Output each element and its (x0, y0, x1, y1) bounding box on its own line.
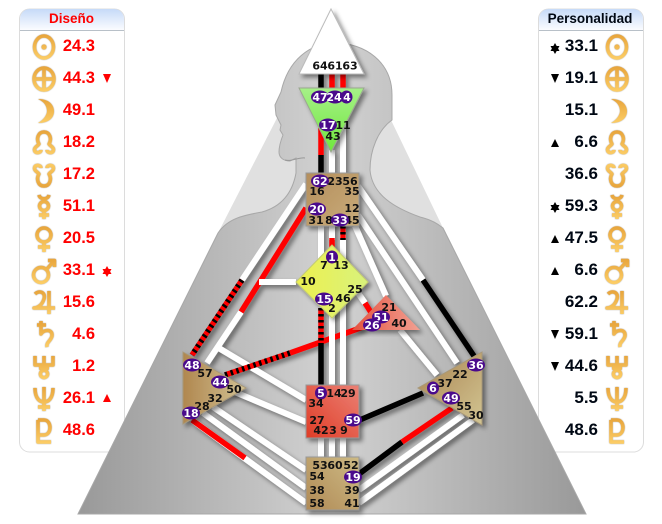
personality activation values: 48.6 (565, 420, 598, 439)
center: throat square: 31 (308, 214, 324, 227)
design activation values: 15.6 (63, 293, 95, 311)
center: root square: 58 (309, 497, 325, 510)
personality activation values: 44.6 (565, 356, 598, 375)
center: G diamond: 1 (328, 251, 336, 264)
center: ajna triangle: 17 (320, 119, 336, 132)
personality activation values: 36.6 (565, 164, 598, 183)
personality activation values: 62.2 (565, 292, 598, 311)
center: left spleen triangle (182, 352, 246, 424)
center: right solar plexus triangle: 6 (429, 382, 437, 395)
center: root square: 39 (344, 484, 360, 497)
center: ajna triangle: 47 (312, 91, 328, 104)
channel: sacral to right triangle, black and red (355, 408, 452, 477)
design activation values: 26.1 (63, 389, 95, 407)
center: root square: 19 (345, 471, 361, 484)
center: root square: 38 (309, 484, 325, 497)
center: G diamond: 7 (320, 259, 328, 272)
design activation values: 49.1 (63, 101, 95, 119)
center: ajna triangle: 11 (335, 119, 351, 132)
personality activation values (565, 36, 598, 439)
center: left spleen triangle: 48 (184, 359, 200, 372)
center: throat square: 35 (344, 185, 360, 198)
channel: spleen to ego striped (225, 353, 290, 375)
design markers (102, 74, 112, 402)
center: ajna triangle (299, 88, 364, 152)
center: ego triangle: 51 (373, 311, 389, 324)
center: G diamond (296, 245, 368, 318)
center: head triangle (299, 9, 364, 74)
center: G diamond: 25 (347, 283, 363, 296)
design activation values: 33.1 (63, 261, 95, 279)
center: left spleen triangle: 50 (226, 383, 242, 396)
center: root square: 52 (343, 459, 359, 472)
center: throat square: 33 (332, 214, 348, 227)
personality activation values: 5.5 (574, 388, 598, 407)
center: sacral-red square: 29 (340, 387, 356, 400)
center: ego triangle (352, 295, 420, 332)
channels: lines under the verticals (192, 215, 473, 503)
center: G diamond: 15 (316, 293, 332, 306)
channels (192, 74, 474, 503)
center: throat square: 12 (344, 202, 360, 215)
center: throat square: 62 (312, 175, 328, 188)
center: sacral-red square: 3 (329, 424, 337, 437)
panel header: Diseño (20, 9, 124, 30)
center: root square: 54 (309, 470, 325, 483)
design activation values: 18.2 (63, 133, 95, 151)
design activation values: 1.2 (72, 357, 95, 375)
center: sacral-red square: 14 (326, 387, 342, 400)
center: right solar plexus triangle: 49 (443, 392, 459, 405)
channel: left outer, white and striped (192, 184, 306, 355)
center: throat square: 16 (309, 185, 325, 198)
center: right solar plexus triangle (418, 352, 485, 425)
personality activation values: 6.6 (574, 132, 598, 151)
personality activation values: 19.1 (565, 68, 598, 87)
design activation values: 44.3 (63, 69, 95, 87)
center: right solar plexus triangle: 22 (452, 368, 468, 381)
panel header: Diseño: Diseño (49, 11, 94, 26)
center: ajna triangle: 4 (343, 91, 351, 104)
center: throat square: 23 (327, 175, 343, 188)
center: root square (306, 457, 362, 510)
center: left spleen triangle: 44 (212, 376, 228, 389)
center: G diamond: 13 (333, 259, 349, 272)
center: sacral-red square (306, 385, 362, 438)
personality activation values: 59.3 (565, 196, 598, 215)
center: ego triangle: 26 (364, 319, 380, 332)
channel: right outer, white and black (358, 186, 474, 356)
design activation values: 48.6 (63, 421, 95, 439)
design activation values: 4.6 (72, 325, 95, 343)
panel header: Personalidad (539, 9, 643, 30)
center: ajna triangle: 43 (325, 130, 341, 143)
center: ajna triangle: 24 (326, 91, 342, 104)
center: throat square (306, 173, 360, 227)
center: sacral-red square: 59 (345, 414, 361, 427)
center: G diamond: 2 (328, 302, 336, 315)
center: root square: 60 (327, 459, 343, 472)
center: throat square: 45 (344, 214, 360, 227)
center: right solar plexus triangle: 30 (468, 409, 484, 422)
center: G diamond: 10 (300, 275, 316, 288)
center: left spleen triangle: 28 (194, 400, 210, 413)
personality activation values: 6.6 (574, 260, 598, 279)
center: ego triangle: 21 (381, 301, 397, 314)
center: throat square: 20 (309, 203, 325, 216)
design activation values: 20.5 (63, 229, 95, 247)
center: G diamond: 46 (335, 292, 351, 305)
body silhouette background (78, 43, 586, 514)
personality activation values: 59.1 (565, 324, 598, 343)
center: sacral-red square: 34 (308, 397, 324, 410)
center: throat square: 8 (325, 214, 333, 227)
personality activation values: 15.1 (565, 100, 598, 119)
center: sacral-red square: 42 (313, 424, 329, 437)
center: right solar plexus triangle: 36 (468, 359, 484, 372)
design planet icons (34, 36, 55, 442)
center: ego triangle: 40 (391, 317, 407, 330)
design activation values: 24.3 (63, 37, 95, 55)
vertical channels (321, 74, 343, 460)
center: right solar plexus triangle: 55 (456, 400, 472, 413)
design activation values: 51.1 (63, 197, 95, 215)
personality markers (550, 43, 560, 371)
personality planet icons (606, 36, 628, 442)
center: left spleen triangle: 18 (183, 407, 199, 420)
center: sacral-red square: 9 (340, 424, 348, 437)
panel header: Personalidad: Personalidad (548, 11, 632, 26)
design activation values: 17.2 (63, 165, 95, 183)
center: sacral-red square: 27 (309, 414, 325, 427)
panel: Diseño (20, 9, 124, 452)
channel: G to ego (358, 293, 372, 314)
center: left spleen triangle: 57 (197, 367, 213, 380)
design activation values (63, 37, 95, 439)
center: head triangle: 63 (342, 60, 358, 72)
center: right solar plexus triangle: 37 (437, 377, 453, 390)
center: head triangle: 64 (312, 60, 328, 72)
channel: left inner, red and white (207, 208, 306, 363)
personality activation values: 33.1 (565, 36, 598, 55)
panel: Personalidad (538, 9, 644, 452)
center: head triangle: 61 (327, 60, 343, 72)
center: root square: 41 (344, 497, 360, 510)
center: sacral-red square: 5 (317, 387, 325, 400)
personality activation values: 47.5 (565, 228, 598, 247)
center: throat square: 56 (342, 175, 358, 188)
channel: center to right triangle, black (355, 393, 423, 422)
center: left spleen triangle: 32 (207, 392, 223, 405)
center: root square: 53 (312, 459, 328, 472)
